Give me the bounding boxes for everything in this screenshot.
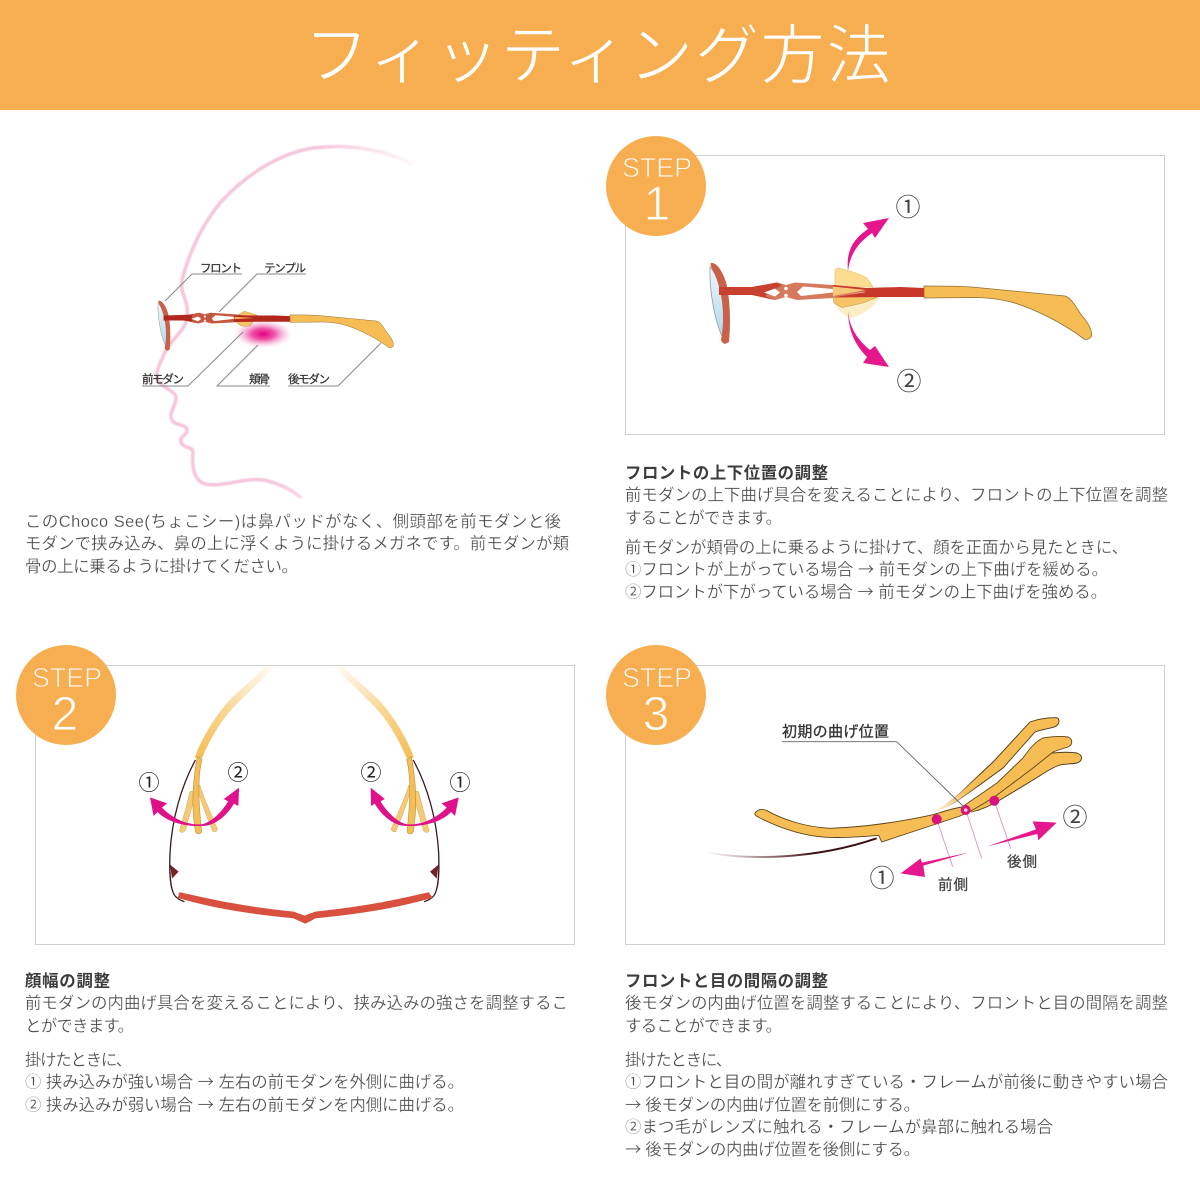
- label: rear modern: 後モダン: [288, 372, 330, 386]
- markers: ①: [450, 772, 470, 795]
- position guide lines: [937, 801, 1011, 867]
- panel: overview illustration: [142, 147, 410, 497]
- text block: step 3: ②まつ毛がレンズに触れる・フレームが鼻部に触れる場合: [625, 1114, 1053, 1138]
- text block: step 3: [625, 972, 1168, 1160]
- label: front modern: 前モダン: [142, 372, 184, 386]
- step badge: STEP: [32, 662, 102, 693]
- step badge: 2: [52, 688, 78, 741]
- label: front side: 前側: [938, 877, 968, 894]
- marker 2: ②: [1062, 804, 1088, 832]
- text block: step 3: フロントと目の間隔の調整: [625, 972, 828, 990]
- left arrows: [150, 788, 239, 826]
- text block: overview description: 骨の上に乗るように掛けてください。: [25, 558, 298, 576]
- step badge: [16, 645, 116, 745]
- markers: ②: [360, 762, 382, 785]
- frame box: [626, 666, 1164, 944]
- text block: step 2: 前モダンの内曲げ具合を変えることにより、挟み込みの強さを調整するこ: [25, 994, 568, 1012]
- marker 2: ②: [896, 368, 922, 396]
- label: temple: テンプル: [264, 262, 306, 275]
- text block: step 1: ②フロントが下がっている場合 → 前モダンの上下曲げを強める。: [625, 578, 1107, 602]
- step badge: STEP: [622, 662, 692, 693]
- frame box: [626, 156, 1164, 434]
- text block: step 3: することができます。: [625, 1018, 782, 1036]
- panel: step 3: [606, 645, 1164, 944]
- temple adjustment illustration: [707, 718, 1082, 877]
- fan temple lower: [970, 752, 1082, 812]
- text block: step 1: 前モダンが頬骨の上に乗るように掛けて、顔を正面から見たときに、: [625, 539, 1128, 557]
- step badge: 3: [643, 688, 669, 741]
- label: front: フロント: [200, 263, 242, 275]
- panel: step 1: [606, 136, 1164, 434]
- text block: overview description: [25, 513, 570, 576]
- left half: [170, 667, 274, 902]
- text block: overview description: モダンで挟み込み、鼻の上に浮くように掛けるメガネです。前モダンが頬: [25, 535, 570, 553]
- arrow down: [848, 310, 889, 367]
- arrow backward: [987, 821, 1057, 847]
- text block: step 3: → 後モダンの内曲げ位置を前側にする。: [625, 1092, 920, 1116]
- front bar: [179, 893, 431, 923]
- label: initial bend position: 初期の曲げ位置: [782, 724, 889, 740]
- text block: step 1: することができます。: [625, 510, 782, 528]
- text block: step 1: [625, 464, 1168, 602]
- text block: step 1: 前モダンの上下曲げ具合を変えることにより、フロントの上下位置を調整: [625, 486, 1168, 504]
- leader lines: [142, 274, 381, 386]
- panel: step 2: [16, 645, 574, 944]
- leader: [782, 742, 965, 808]
- step badge: [606, 136, 706, 236]
- text block: step 2: ① 挟み込みが強い場合 → 左右の前モダンを外側に曲げる。: [25, 1068, 464, 1092]
- text block: step 2: ② 挟み込みが弱い場合 → 左右の前モダンを内側に曲げる。: [25, 1092, 464, 1116]
- frame box: [36, 666, 574, 944]
- text block: step 2: 掛けたときに、: [25, 1052, 132, 1070]
- label: cheekbone: 頬骨: [249, 372, 270, 386]
- markers: ①: [138, 772, 160, 795]
- text block: step 3: ①フロントと目の間が離れすぎている・フレームが前後に動きやすい場合: [625, 1068, 1168, 1092]
- step badge: 1: [644, 178, 670, 231]
- marker 1: ①: [895, 194, 921, 222]
- glasses side view with adjustment: [710, 263, 1092, 344]
- side view glasses: [158, 301, 393, 351]
- text block: step 2: とができます。: [25, 1018, 134, 1036]
- fan temple upper: [932, 718, 1059, 813]
- label: rear side: 後側: [1007, 854, 1037, 871]
- right arrows: [371, 788, 459, 826]
- step badge: [606, 645, 706, 745]
- title: フィッティング方法: [304, 19, 891, 92]
- arrow up: [848, 218, 889, 271]
- main temple with middle fan: [755, 736, 1072, 842]
- markers: [138, 762, 470, 795]
- head profile outline: [157, 147, 410, 497]
- header band: [0, 0, 1200, 110]
- wire: [707, 838, 877, 857]
- marker 1: ①: [869, 865, 895, 893]
- text block: overview description: このChoco See(ちょこシー)は鼻パッドがなく、側頭部を前モダンと後: [25, 513, 561, 531]
- right half: [334, 667, 439, 902]
- step badge: STEP: [622, 152, 692, 183]
- text block: step 3: 後モダンの内曲げ位置を調整することにより、フロントと目の間隔を調整: [625, 994, 1168, 1012]
- text block: step 3: 掛けたときに、: [625, 1052, 732, 1070]
- text block: step 2: 顔幅の調整: [25, 972, 110, 990]
- cheekbone highlight: [234, 320, 292, 348]
- arrow forward: [901, 852, 969, 877]
- position dots: [932, 814, 942, 824]
- glasses top view: [150, 667, 459, 923]
- text block: step 2: [25, 972, 568, 1116]
- text block: step 1: フロントの上下位置の調整: [625, 464, 828, 482]
- text block: step 1: ①フロントが上がっている場合 → 前モダンの上下曲げを緩める。: [625, 556, 1108, 580]
- text block: step 3: → 後モダンの内曲げ位置を後側にする。: [625, 1136, 920, 1160]
- markers: ②: [228, 762, 248, 785]
